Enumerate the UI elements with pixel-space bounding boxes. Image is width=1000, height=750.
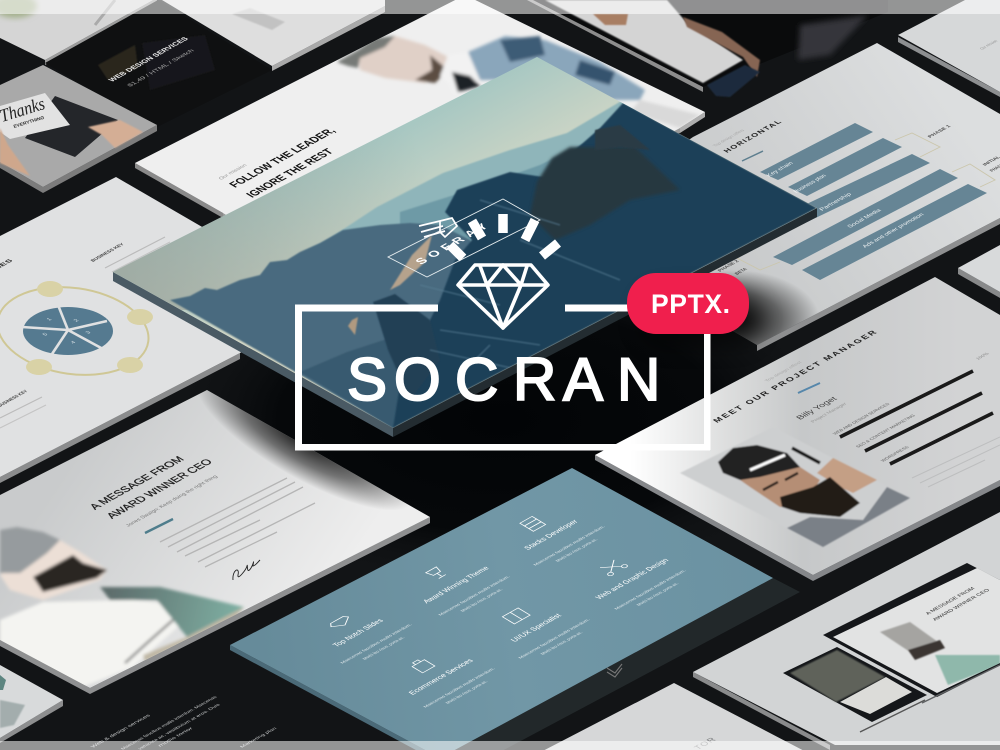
- service: web and graphic design: Web and Graphic Design: [594, 557, 670, 601]
- chart: pie with five segments: 5: [42, 332, 50, 337]
- service: web and graphic design: Maecenas faucibus mollis interdum.: [613, 569, 687, 610]
- top translucent strip: [0, 0, 1000, 14]
- service: stacks developer: Stacks Developer: [522, 518, 580, 551]
- service: ecommerce services: Ecommerce Services: [407, 657, 475, 696]
- text block: dark slide services text: Marketing plan: [239, 726, 278, 748]
- service: ui/ux specialist: Morbi leo risus, porta ac.: [540, 631, 584, 656]
- panel: web design services slide: [45, 0, 272, 128]
- service: award winning theme: Morbi leo risus, porta ac.: [460, 588, 504, 613]
- text: tablet headline one: A MESSAGE FROM: [925, 586, 977, 616]
- text: name: Billy Yoget: [794, 395, 840, 421]
- bar: business plan: [788, 138, 902, 196]
- panel: device mockup slide: [693, 512, 1000, 750]
- service: web and graphic design: [572, 544, 694, 615]
- icon: neck skin: [593, 14, 628, 25]
- bar: key chain: Key chain: [765, 161, 795, 178]
- text block: dark slide services text: [90, 695, 278, 750]
- panel: horizontal chart slide: [690, 43, 1000, 351]
- chart: pie with five segments: 3: [85, 330, 93, 335]
- chart: pie with five segments: [22, 305, 113, 355]
- icon: face: [740, 460, 820, 507]
- service: award winning theme: [396, 550, 518, 621]
- service: top notch slides: Maecenas faucibus mollis interdum.: [339, 623, 413, 664]
- panel: CEO message slide: [0, 390, 430, 694]
- photo: light streaks: [420, 200, 620, 375]
- service: top notch slides: Morbi leo risus, porta ac.: [362, 636, 406, 661]
- icon: comb highlight: [750, 455, 785, 470]
- text: beta: BETA: [734, 267, 749, 276]
- photo: pale far ridge: [336, 102, 646, 234]
- text: top design offers: Top design offers: [712, 128, 746, 147]
- shadow beside pptx badge: [720, 272, 816, 345]
- panel: small right slide: [958, 245, 1000, 298]
- heading: horizontal: HORIZONTAL: [721, 119, 784, 154]
- icon: beard: [33, 555, 107, 592]
- icon: shirt: [787, 487, 910, 547]
- panel: t-shirt photo slide: [527, 0, 888, 97]
- bracket: initial phase: [952, 164, 995, 187]
- icon: dark envelope: [25, 96, 118, 157]
- text: ceo body lines: [160, 478, 315, 567]
- logo: bird and sofray badge: [388, 199, 540, 277]
- icon: large tablet: [823, 563, 1000, 697]
- icon: shirt fold stroke: [125, 620, 173, 663]
- text block: dark slide services text: Maecenas faucibus mollis interdum. Maecenas: [120, 695, 218, 750]
- chart: pie with five segments: 2: [73, 318, 81, 323]
- service: top notch slides: Top Notch Slides: [331, 617, 385, 648]
- bar: social media: [773, 169, 958, 265]
- icon: white tee: [545, 0, 743, 83]
- icon: face: [0, 540, 107, 600]
- photo: bearded manager: [680, 427, 910, 547]
- service: top notch slides: [302, 600, 420, 669]
- logo: bird and sofray badge: SOFRAY: [412, 219, 496, 266]
- panel: top-centre white slide: [162, 0, 385, 71]
- bar: business plan: Business plan: [792, 173, 828, 194]
- icon: beard: [780, 477, 860, 517]
- panel: follow the leader slide: [135, 0, 705, 217]
- bar: ads and other promotion: Ads and other promotion: [861, 212, 926, 249]
- bar: social media: Social Media: [846, 208, 883, 229]
- icon: hair: [0, 527, 60, 573]
- icon: right hand: [88, 120, 143, 148]
- service: award winning theme: Maecenas faucibus mollis interdum.: [437, 575, 511, 616]
- bar: partnership: [735, 154, 930, 247]
- photo: man in suit: [337, 36, 700, 128]
- icon: hand: [817, 458, 877, 493]
- text: phase 1: PHASE 1: [927, 124, 953, 139]
- bar: ads and other promotion: [802, 184, 987, 280]
- icon: left hand: [0, 128, 30, 176]
- service: ecommerce services: [380, 642, 503, 713]
- text: role: Project Manager: [810, 402, 849, 424]
- text: price line: $1,49 / HTML / Sketch: [126, 48, 196, 88]
- icon: jeans: [707, 65, 760, 97]
- bracket: phase 2: [735, 257, 780, 270]
- icon: hair: [718, 445, 800, 480]
- photo: middle pale ridge: [400, 144, 581, 242]
- panel: project manager slide: [595, 277, 1000, 581]
- badge: pptx: PPTX.: [651, 289, 730, 319]
- text: thanks small line: EVERYTHING: [13, 115, 45, 129]
- panel: top-right slide: [898, 0, 1000, 97]
- photo: lower blue ridge: [302, 340, 399, 428]
- panel: top-left photo slide: [0, 0, 157, 65]
- bottom translucent strip: [0, 741, 1000, 750]
- bracket: phase 1: [895, 133, 940, 157]
- heading: meet our project manager: MEET OUR PROJECT MANAGER: [711, 329, 879, 424]
- chart: skill bars: [832, 352, 993, 464]
- illustration: watercolour man: [0, 527, 244, 687]
- text: tablet headline two: AWARD WINNER CEO: [932, 588, 992, 622]
- icon: eyes: [763, 482, 778, 490]
- service: award winning theme: Award Winning Theme: [421, 565, 491, 605]
- heading: web design services: WEB DESIGN SERVICES: [106, 36, 190, 83]
- panel: teal services slide: [230, 468, 800, 750]
- icon: thanks card: [0, 93, 70, 139]
- icon: chevron: [607, 664, 622, 677]
- panel: bottom-centre slide: [535, 683, 812, 750]
- service: ui/ux specialist: [475, 593, 598, 664]
- icon: hair: [337, 36, 395, 68]
- heading: ignore the rest: IGNORE THE REST: [243, 146, 337, 199]
- service: ecommerce services: Maecenas faucibus mollis interdum.: [422, 667, 496, 708]
- icon: suit: [468, 36, 645, 100]
- photo: left blue ridge: [170, 223, 490, 428]
- chart: skill bars: WORDPRESS: [880, 445, 910, 462]
- icon: arm: [683, 17, 760, 77]
- icon: teal shirt: [100, 587, 244, 637]
- text: manager bio lines: [912, 437, 1000, 487]
- photo: charcoal ridge: [530, 147, 680, 240]
- text: our mission: Our mission: [218, 163, 249, 181]
- text: business key top: BUSINESS KEY: [90, 242, 126, 263]
- chart: skill bars: 100%: [975, 352, 990, 360]
- photo: sky: [100, 50, 830, 440]
- heading: a message from: A MESSAGE FROM: [87, 455, 187, 511]
- panel: foreground logo: [295, 214, 749, 450]
- icon: light rays: [450, 214, 558, 258]
- text: top design effect: Top design effect: [764, 360, 803, 382]
- service: stacks developer: Morbi leo risus, porta ac.: [555, 538, 599, 563]
- heading: follow the leader: FOLLOW THE LEADER,: [226, 126, 338, 189]
- icon: beard: [415, 55, 448, 83]
- heading: award winner ceo: AWARD WINNER CEO: [104, 457, 215, 520]
- badge: pptx: [627, 273, 749, 334]
- chart: pie with five segments: 4: [70, 340, 78, 345]
- icon: small tablet: [783, 647, 927, 732]
- chart: ring with nodes: [0, 278, 154, 384]
- bar: key chain: [760, 123, 873, 180]
- icon: pen: [792, 448, 820, 463]
- icon: signature: [233, 560, 260, 580]
- service: stacks developer: [491, 500, 613, 571]
- chart: pie with five segments: 1: [46, 317, 54, 322]
- chart: skill bars: SEO & CONTENT MARKETING: [855, 414, 917, 448]
- text block: dark slide services text: vehicula ac, vestibulum at eros. Duis: [137, 703, 222, 750]
- icon: diamond: [458, 265, 548, 328]
- service: stacks developer: Maecenas faucibus mollis interdum.: [532, 525, 606, 566]
- panel: pie chart slide: [0, 177, 335, 483]
- chart: skill bars: WEB AND DESIGN SERVICES: [832, 402, 891, 435]
- bar: partnership: Partnership: [818, 192, 854, 212]
- text: phase 2: PHASE 2: [717, 259, 741, 273]
- panel: bottom-left small slide: [0, 665, 63, 743]
- frame: white rectangle: [295, 304, 710, 450]
- text block: dark slide services text: Web & design services: [90, 713, 152, 749]
- panel: thanks slide: [0, 65, 157, 193]
- icon: face: [358, 36, 450, 83]
- icon: white tee: [0, 600, 200, 687]
- service: ecommerce services: Morbi leo risus, porta ac.: [445, 680, 489, 705]
- service: ui/ux specialist: Maecenas faucibus mollis interdum.: [517, 618, 591, 659]
- photo: sand streak: [390, 235, 432, 290]
- text block: dark slide services text: mollis tortor: [157, 726, 194, 747]
- centre dark glow: [160, 250, 840, 590]
- panel: mountain cover slide: [100, 50, 830, 440]
- heading: socran: SOCRAN: [347, 346, 660, 413]
- service: web and graphic design: Morbi leo risus, porta ac.: [636, 582, 680, 607]
- service: ui/ux specialist: UI/UX Specialist: [509, 612, 564, 643]
- photo: dark navy massif: [393, 103, 817, 428]
- shadow: badge: [640, 290, 760, 345]
- text: ceo subtitle: Jones Swaign: Keep doing the right thing: [125, 475, 219, 528]
- icon: collar and tie: [440, 52, 480, 95]
